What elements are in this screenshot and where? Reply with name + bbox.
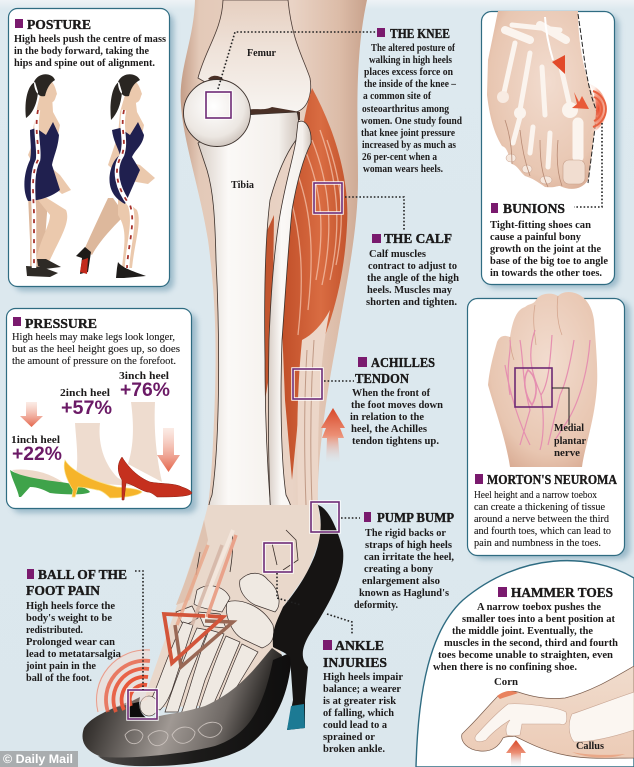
label: medial plantar nerve: Medial xyxy=(554,423,584,434)
text: pressure: but as the heel height goes up, so does xyxy=(12,344,180,355)
text: morton's neuroma: around a nerve between the third xyxy=(474,514,610,525)
text: ankle injuries: is at greater risk xyxy=(323,696,396,707)
heading: ankle injuries: ANKLE xyxy=(335,639,384,654)
figure: flat shoes xyxy=(24,74,71,277)
heading: achilles tendon: TENDON xyxy=(355,372,409,387)
text: ball of the foot pain: body's weight to be xyxy=(26,613,112,624)
text: posture: High heels push the centre of mass xyxy=(14,34,166,45)
section: ankle injuries xyxy=(323,639,403,755)
label: 3 inch: +76% xyxy=(120,380,170,401)
panel: bunions xyxy=(482,11,619,288)
shoe: 2 inch yellow xyxy=(64,423,142,498)
heading: ball of the foot pain: FOOT PAIN xyxy=(26,584,100,599)
heading: the knee xyxy=(377,27,450,42)
text: bunions: growth on the joint at the xyxy=(490,244,601,255)
foot sole xyxy=(488,292,597,467)
label: corn: Corn xyxy=(494,677,518,688)
leg skin xyxy=(181,0,367,510)
heading: the knee: THE KNEE xyxy=(390,27,450,42)
high-heel shoe xyxy=(82,505,343,766)
arrow: down chevrons xyxy=(157,428,180,472)
text: ball of the foot pain: redistributed. xyxy=(26,625,83,636)
text: hammer toes: toes become unable to straighten, even xyxy=(438,650,613,661)
text: achilles tendon xyxy=(350,388,443,447)
text: the knee: places excess force on xyxy=(364,67,453,78)
force arrows in the foot xyxy=(164,530,236,667)
text: pump bump: deformity. xyxy=(354,600,398,611)
text: the knee: the inside of the knee – xyxy=(364,79,457,90)
text: posture: in the body forward, taking the xyxy=(14,46,149,57)
text: ankle injuries: sprained or xyxy=(323,732,375,743)
text: morton's neuroma: Heel height and a narrow toebox xyxy=(474,490,598,501)
text: ball of the foot pain: Prolonged wear can xyxy=(26,637,115,648)
heading: achilles tendon xyxy=(355,356,435,387)
shoe: 3 inch red xyxy=(118,402,192,500)
label: medial plantar nerve: nerve xyxy=(554,448,580,459)
heading: posture: POSTURE xyxy=(27,18,91,33)
bone label: femur: Femur xyxy=(247,48,276,59)
text: achilles tendon: heel, the Achilles xyxy=(351,424,427,435)
section: pump bump xyxy=(354,511,454,611)
label: 1 inch: 1inch heel xyxy=(11,435,60,446)
heading: bunions: BUNIONS xyxy=(503,202,565,217)
fibula bone xyxy=(268,121,311,536)
text: bunions: Tight-fitting shoes can xyxy=(490,220,591,231)
section: ball of the foot pain xyxy=(25,568,127,684)
heading: achilles tendon: ACHILLES xyxy=(371,356,435,371)
section: the knee xyxy=(361,27,462,175)
panel: pressure xyxy=(6,308,197,513)
heading: ankle injuries: INJURIES xyxy=(323,656,387,671)
text: pump bump: creating a bony xyxy=(364,564,434,575)
tibia bone xyxy=(198,112,299,533)
label: 1 inch xyxy=(11,435,62,465)
text: ball of the foot pain xyxy=(25,601,122,684)
text: the knee: The altered posture of xyxy=(371,43,455,54)
panel: morton's neuroma xyxy=(468,292,630,559)
text: hammer toes: smaller toes into a bent position at xyxy=(462,614,615,625)
text: pressure: High heels may make legs look longer, xyxy=(12,332,175,343)
text: ball of the foot pain: lead to metatarsalgia xyxy=(26,649,122,660)
text: achilles tendon: When the front of xyxy=(352,388,430,399)
label: 1 inch: +22% xyxy=(12,444,62,465)
text: achilles tendon: the foot moves down xyxy=(351,400,443,411)
neuroma marker xyxy=(515,368,569,425)
heading: ankle injuries xyxy=(323,639,387,671)
text: pump bump: known as Haglund's xyxy=(359,588,449,599)
credit: daily mail xyxy=(0,751,78,767)
text: the knee: a common site of xyxy=(363,91,431,102)
label: callus: Callus xyxy=(576,741,604,752)
text: morton's neuroma: and fourth toes, which can lead to xyxy=(474,526,611,537)
label: 3 inch: 3inch heel xyxy=(119,371,169,382)
label: medial plantar nerve xyxy=(554,423,586,459)
text: ankle injuries: could lead to a xyxy=(323,720,388,731)
toe illustration xyxy=(462,666,634,766)
text: bunions: cause a painful bony xyxy=(490,232,582,243)
figure: high heels xyxy=(76,74,155,278)
leg illustration xyxy=(82,0,367,766)
label: 2 inch: 2inch heel xyxy=(60,388,110,399)
panel: hammer toes xyxy=(416,561,634,767)
text: the calf: shorten and tighten. xyxy=(366,297,457,308)
text: the knee: woman wears heels. xyxy=(363,164,443,175)
text: the calf: heels. Muscles may xyxy=(367,285,453,296)
text: ankle injuries: balance; a wearer xyxy=(323,684,401,695)
arrow: down small xyxy=(20,402,43,427)
text: ankle injuries: broken ankle. xyxy=(323,744,385,755)
text: the knee: walking in high heels xyxy=(369,55,452,66)
foot and ankle bones xyxy=(143,505,322,715)
text: achilles tendon: in relation to the xyxy=(350,412,424,423)
section: achilles tendon xyxy=(350,356,443,447)
text: pressure: the amount of pressure on the forefoot. xyxy=(12,356,176,367)
text: posture xyxy=(14,34,166,69)
text: the calf: Calf muscles xyxy=(369,249,426,260)
text: the calf xyxy=(366,249,459,308)
label: 3 inch xyxy=(119,371,170,401)
callout line xyxy=(574,123,602,207)
text: the calf: the angle of the high xyxy=(367,273,459,284)
heading: pressure: PRESSURE xyxy=(25,317,97,332)
foot x-ray xyxy=(487,11,598,189)
text: pump bump: can irritate the heel, xyxy=(364,552,454,563)
label: 2 inch: +57% xyxy=(61,398,112,419)
text: ball of the foot pain: High heels force the xyxy=(26,601,115,612)
arrow: tendon pull xyxy=(321,408,345,463)
heading: ball of the foot pain: BALL OF THE xyxy=(38,568,127,583)
text: pump bump: enlargement also xyxy=(362,576,440,587)
text: ankle injuries: High heels impair xyxy=(323,672,403,683)
text: the knee xyxy=(361,43,462,175)
text: the knee: increased by as much as xyxy=(362,140,456,151)
text: bunions: base of the big toe to angle xyxy=(490,256,608,267)
text: pump bump: straps of high heels xyxy=(365,540,452,551)
text: achilles tendon: tendon tightens up. xyxy=(352,436,439,447)
text: hammer toes: when there is no confining shoe. xyxy=(433,662,577,673)
text: bunions: in towards the other toes. xyxy=(490,268,602,279)
text: pressure xyxy=(12,332,180,367)
text: pump bump xyxy=(354,528,454,611)
text: morton's neuroma xyxy=(474,490,611,549)
panel: posture xyxy=(8,8,174,291)
credit: daily mail: © Daily Mail xyxy=(3,754,73,766)
text: ball of the foot pain: ball of the foot. xyxy=(26,673,92,684)
heading: hammer toes: HAMMER TOES xyxy=(511,586,613,601)
text: hammer toes: the middle joint. Eventually, the xyxy=(452,626,593,637)
text: the knee: that knee joint pressure xyxy=(361,128,455,139)
bunion rings xyxy=(590,84,607,134)
section: the calf xyxy=(366,232,459,308)
text: ankle injuries: of falling, which xyxy=(323,708,394,719)
femur bone xyxy=(198,0,311,115)
bone label: tibia: Tibia xyxy=(231,180,255,191)
text: ball of the foot pain: joint pain in the xyxy=(25,661,96,672)
text: ankle injuries xyxy=(323,672,403,755)
text: posture: hips and spine out of alignment. xyxy=(14,58,155,69)
label: 2 inch xyxy=(60,388,112,419)
text: the knee: 26 per-cent when a xyxy=(362,152,438,163)
callout markers xyxy=(128,32,404,719)
text: the calf: contract to adjust to xyxy=(368,261,457,272)
text: morton's neuroma: can create a thickening of tissue xyxy=(474,502,605,513)
text: hammer toes: muscles in the second, third and fourth xyxy=(444,638,618,649)
text: hammer toes xyxy=(433,602,618,673)
text: the knee: women. One study found xyxy=(361,116,462,127)
ball of foot rings xyxy=(96,649,150,712)
text: morton's neuroma: pain and numbness in the toes. xyxy=(474,538,601,549)
label: medial plantar nerve: plantar xyxy=(554,436,586,447)
knee joint sphere xyxy=(184,80,250,146)
calf muscle xyxy=(263,88,347,510)
text: bunions xyxy=(490,220,608,279)
heading: the calf: THE CALF xyxy=(384,232,452,247)
shoe: 1 inch green xyxy=(10,470,90,497)
text: the knee: osteoarthritus among xyxy=(362,104,450,115)
heading: pump bump: PUMP BUMP xyxy=(377,511,454,526)
heading: ball of the foot pain xyxy=(26,568,127,599)
text: hammer toes: A narrow toebox pushes the xyxy=(477,602,601,613)
text: pump bump: The rigid backs or xyxy=(365,528,446,539)
